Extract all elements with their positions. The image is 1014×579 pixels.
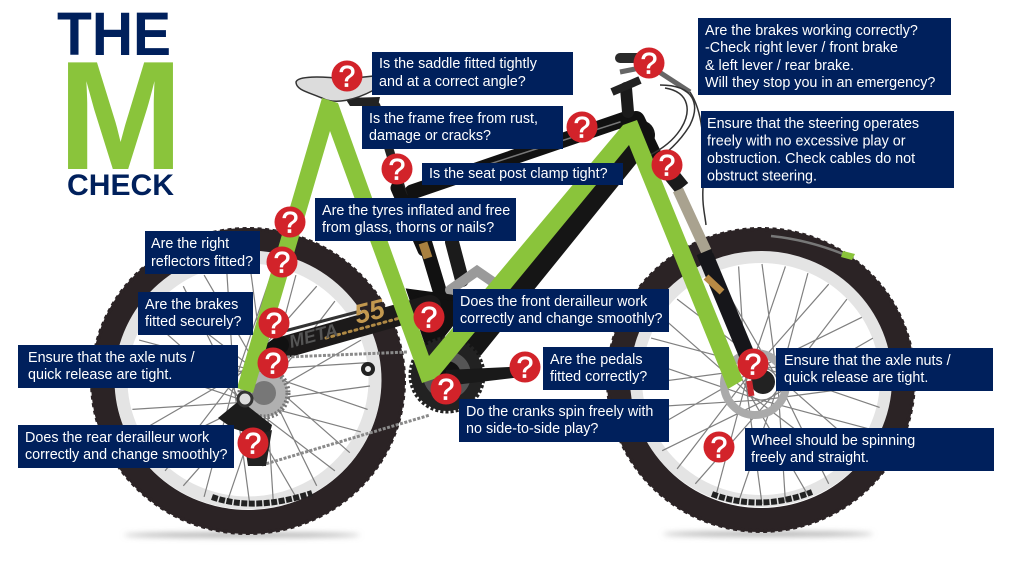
callout: front derailleur: Does the front derailleur work	[460, 294, 648, 310]
callout: cranks: Do the cranks spin freely with	[466, 404, 653, 420]
frame	[262, 88, 654, 358]
icon: question tyres: ?	[282, 206, 298, 240]
callout: rear brakes	[138, 292, 253, 335]
icon: question rear derailleur: ?	[245, 428, 261, 460]
callout: tyres	[315, 198, 516, 241]
callout: saddle: and at a correct angle?	[379, 74, 526, 90]
frame lettering: 55	[351, 293, 389, 330]
callout: wheel: Wheel should be spinning	[751, 433, 915, 449]
icon: question reflectors: ?	[274, 246, 290, 280]
callout: steering: obstruct steering.	[707, 168, 817, 184]
icon: question wheel	[704, 432, 734, 464]
icon: question steering	[652, 150, 682, 182]
callout: rear axle	[18, 345, 238, 388]
icon: question cranks: ?	[438, 374, 454, 406]
callout: rear brakes: fitted securely?	[145, 314, 241, 330]
callout: frame: damage or cracks?	[369, 128, 491, 144]
callout: brakes working	[698, 18, 951, 95]
callout: brakes working: Will they stop you in an emergency?	[705, 75, 935, 91]
icon: question saddle: ?	[339, 60, 355, 94]
callout: rear axle: quick release are tight.	[28, 367, 172, 383]
icon: question rear axle	[258, 348, 288, 380]
icon: question wheel: ?	[711, 432, 727, 464]
icon: question steering: ?	[659, 150, 675, 182]
callout: steering: obstruction. Check cables do not	[707, 151, 915, 167]
callout: steering	[701, 111, 954, 188]
callout: reflectors	[145, 231, 260, 274]
callout: saddle: Is the saddle fitted tightly	[379, 56, 538, 72]
icon: question brakes	[634, 48, 664, 80]
icon: question seat post	[382, 154, 412, 186]
icon: question rear axle: ?	[265, 348, 281, 380]
icon: question reflectors	[266, 246, 298, 280]
saddle	[296, 76, 380, 106]
callout: front axle	[776, 348, 993, 391]
callout: brakes working: -Check right lever / front brake	[705, 40, 898, 56]
callout: wheel: freely and straight.	[751, 450, 869, 466]
callout: reflectors: reflectors fitted?	[151, 254, 253, 270]
icon: question rear brakes: ?	[266, 308, 282, 340]
icon: question cranks	[430, 374, 462, 406]
frame lettering: META	[287, 320, 340, 352]
callout: pedals: Are the pedals	[550, 352, 642, 368]
callout: brakes working: & left lever / rear brake.	[705, 58, 854, 74]
icon: question frame	[566, 112, 598, 144]
green M overlay	[237, 98, 743, 393]
callout: cranks	[459, 399, 669, 442]
callout: tyres: Are the tyres inflated and free	[322, 203, 510, 219]
icon: question frame: ?	[574, 112, 590, 144]
callout: steering: Ensure that the steering operates	[707, 116, 919, 132]
icon: question front derailleur	[414, 302, 444, 334]
callout: frame	[362, 106, 563, 149]
callout: brakes working: Are the brakes working correctly?	[705, 23, 918, 39]
callout: cranks: no side-to-side play?	[466, 421, 598, 437]
callout: wheel	[745, 428, 994, 471]
icon: question seat post: ?	[389, 154, 405, 186]
title: The M Check: THE	[57, 0, 171, 68]
callout: steering: freely with no excessive play or	[707, 134, 906, 150]
title: The M Check: M	[58, 29, 183, 202]
callout: reflectors: Are the right	[151, 236, 229, 252]
icon: question rear brakes	[258, 308, 290, 340]
front wheel	[608, 229, 914, 531]
drivetrain: chain, chainrings, crank, derailleur	[218, 339, 530, 466]
icon: question front axle	[738, 348, 768, 382]
title: The M Check: CHECK	[67, 169, 174, 202]
callout: tyres: from glass, thorns or nails?	[322, 220, 494, 236]
icon: question pedals: ?	[517, 352, 533, 384]
callout: front axle: quick release are tight.	[784, 370, 928, 386]
icon: question tyres	[274, 206, 306, 240]
bicycle illustration	[92, 58, 914, 538]
icon: question rear derailleur	[238, 428, 268, 460]
callout: saddle	[372, 52, 573, 95]
callout: front derailleur: correctly and change smoothly?	[460, 311, 663, 327]
frame lettering	[287, 293, 389, 352]
icon: question front derailleur: ?	[421, 302, 437, 334]
callout: frame: Is the frame free from rust,	[369, 111, 538, 127]
callout: rear derailleur: correctly and change smoothly?	[25, 447, 228, 463]
callout: rear derailleur	[18, 425, 234, 468]
handlebar and cables	[612, 58, 706, 225]
callout: seat post clamp	[422, 163, 623, 185]
callout: front derailleur	[453, 289, 669, 332]
front fork	[669, 172, 758, 396]
callout: rear brakes: Are the brakes	[145, 297, 238, 313]
callout: pedals	[543, 347, 669, 390]
icon: question front axle: ?	[745, 348, 761, 382]
callout: front axle: Ensure that the axle nuts /	[784, 353, 951, 369]
icon: question brakes: ?	[641, 48, 657, 80]
callout: rear derailleur: Does the rear derailleur work	[25, 430, 210, 446]
rear wheel	[92, 229, 404, 533]
icon: question pedals	[510, 352, 540, 384]
callout: pedals: fitted correctly?	[550, 369, 647, 385]
callout: seat post clamp: Is the seat post clamp tight?	[429, 166, 608, 182]
callout: rear axle: Ensure that the axle nuts /	[28, 350, 195, 366]
icon: question saddle	[332, 60, 362, 94]
